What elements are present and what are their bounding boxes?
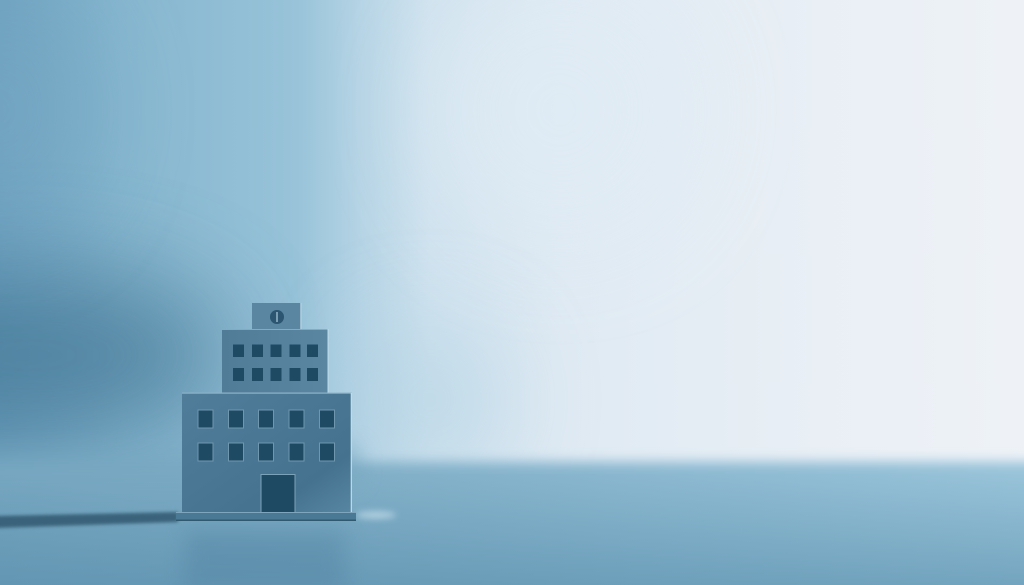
icon: round emblem — [270, 310, 284, 324]
floor light glow — [356, 512, 396, 518]
base plinth — [176, 512, 356, 521]
building — [176, 303, 356, 521]
rooftop sign — [252, 303, 302, 329]
upper windows — [233, 344, 318, 381]
lower windows — [198, 410, 334, 461]
upper storey — [222, 329, 329, 392]
lower storey — [182, 392, 352, 513]
cast shadow — [0, 512, 178, 528]
door — [261, 474, 295, 512]
floor — [0, 445, 1024, 585]
